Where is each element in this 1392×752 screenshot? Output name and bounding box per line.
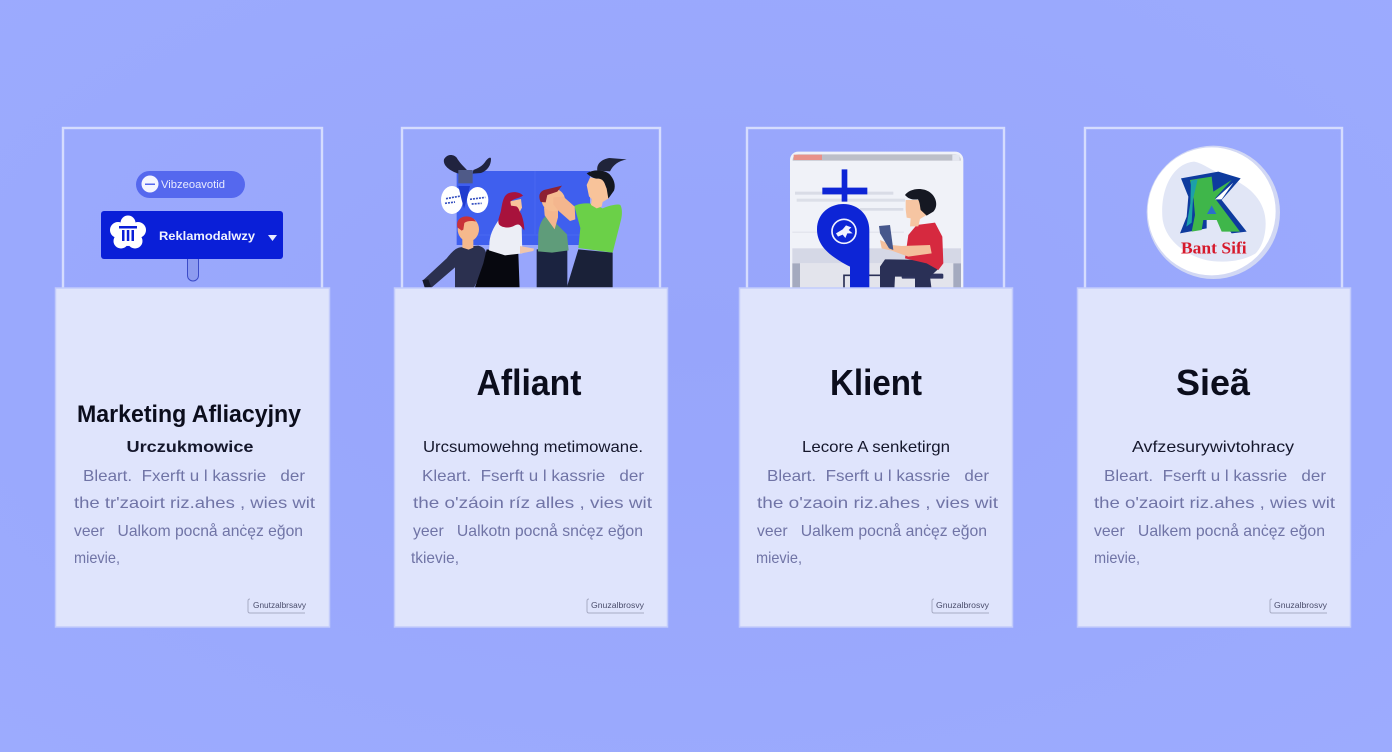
body text	[411, 468, 653, 567]
body text	[1094, 468, 1336, 567]
body text	[74, 468, 316, 567]
body text: veer Ualkem pocnå anċęz eğon	[757, 522, 987, 540]
tag	[1270, 599, 1327, 613]
blue board	[457, 171, 590, 245]
illustration: people at a board	[422, 155, 627, 290]
icon: video pill badge: Vibzeoavotid	[161, 179, 225, 191]
icon: blue pin with emblem	[817, 204, 869, 290]
tag	[248, 599, 306, 613]
body text: the tr'zaoirt riz.ahes , wies wit	[74, 495, 316, 512]
tag: Gnuzalbrosvy	[1274, 601, 1327, 610]
subheading: Urcsumowehng metimowane.	[423, 439, 643, 456]
body text: the o'záoin ríz alles , vies wit	[413, 495, 653, 512]
ad dropdown button: Reklamodalwzy	[159, 229, 255, 243]
subheading: Avfzesurywivtohracy	[1132, 439, 1294, 456]
body text: Bleart. Fxerft u l kassrie der	[83, 468, 306, 485]
ad dropdown button	[101, 211, 283, 259]
woman in white top	[474, 192, 534, 290]
body text: mievie,	[756, 550, 802, 567]
heading: Marketing Afliacyjny	[77, 401, 302, 428]
icon: round logo	[1147, 146, 1280, 279]
image frame	[63, 128, 322, 298]
body text: Bleart. Fserft u l kassrie der	[1104, 468, 1327, 485]
illustration: customer at browser window	[790, 152, 963, 290]
body text: yeer Ualkotn pocnå snċęz eğon	[413, 522, 643, 540]
logo caption: Bant Sifi	[1181, 238, 1247, 257]
body text: the o'zaoin riz.ahes , vies wit	[757, 495, 999, 512]
body text: Bleart. Fserft u l kassrie der	[767, 468, 990, 485]
card: Marketing Afiliacyjny	[56, 288, 330, 627]
icon: blue plus	[822, 169, 867, 202]
body text	[756, 468, 999, 567]
heading: Klient	[830, 362, 922, 403]
logo letter	[1180, 172, 1247, 233]
tag	[932, 599, 989, 613]
card: Sieć	[1078, 288, 1350, 627]
body text: mievie,	[1094, 550, 1140, 567]
body text: Kleart. Fserft u l kassrie der	[422, 468, 645, 485]
body text: veer Ualkom pocnå anċęz eğon	[74, 522, 303, 540]
panel: Marketing Afiliacyjny illustration	[63, 128, 322, 298]
image frame	[747, 128, 1004, 298]
crouching man	[422, 216, 486, 289]
image frame	[402, 128, 660, 298]
tag: Gnuzalbrosvy	[936, 601, 989, 610]
tag: Gnutzalbrsavy	[253, 601, 306, 610]
body text: veer Ualkem pocnå anċęz eğon	[1094, 522, 1325, 540]
heading: Afliant	[476, 362, 582, 403]
tag	[587, 599, 644, 613]
subheading: Urczukmowice	[126, 439, 254, 456]
tag: Gnuzalbrosvy	[591, 601, 644, 610]
man in green shirt with ponytail	[553, 158, 627, 290]
icon: video pill badge	[136, 171, 245, 198]
body text: the o'zaoirt riz.ahes , wies wit	[1094, 495, 1336, 512]
card: Klient	[740, 288, 1012, 627]
card: Afiliant	[394, 288, 668, 627]
heading: Sieã	[1176, 362, 1251, 403]
seated man with tablet	[879, 189, 943, 290]
panel: Sieć illustration	[1085, 128, 1342, 298]
stool	[844, 274, 943, 290]
body text: tkievie,	[411, 550, 459, 567]
panel: Afiliant illustration	[402, 128, 660, 298]
browser window	[790, 152, 963, 290]
subheading: Lecore A senketirgn	[802, 439, 950, 456]
panel: Klient illustration	[747, 128, 1004, 298]
body text: mievie,	[74, 550, 120, 567]
man in green-grey shirt	[537, 186, 569, 290]
speech bubbles	[441, 186, 488, 214]
icon: paper clip	[188, 254, 198, 281]
dark bow	[444, 155, 491, 183]
image frame	[1085, 128, 1342, 298]
